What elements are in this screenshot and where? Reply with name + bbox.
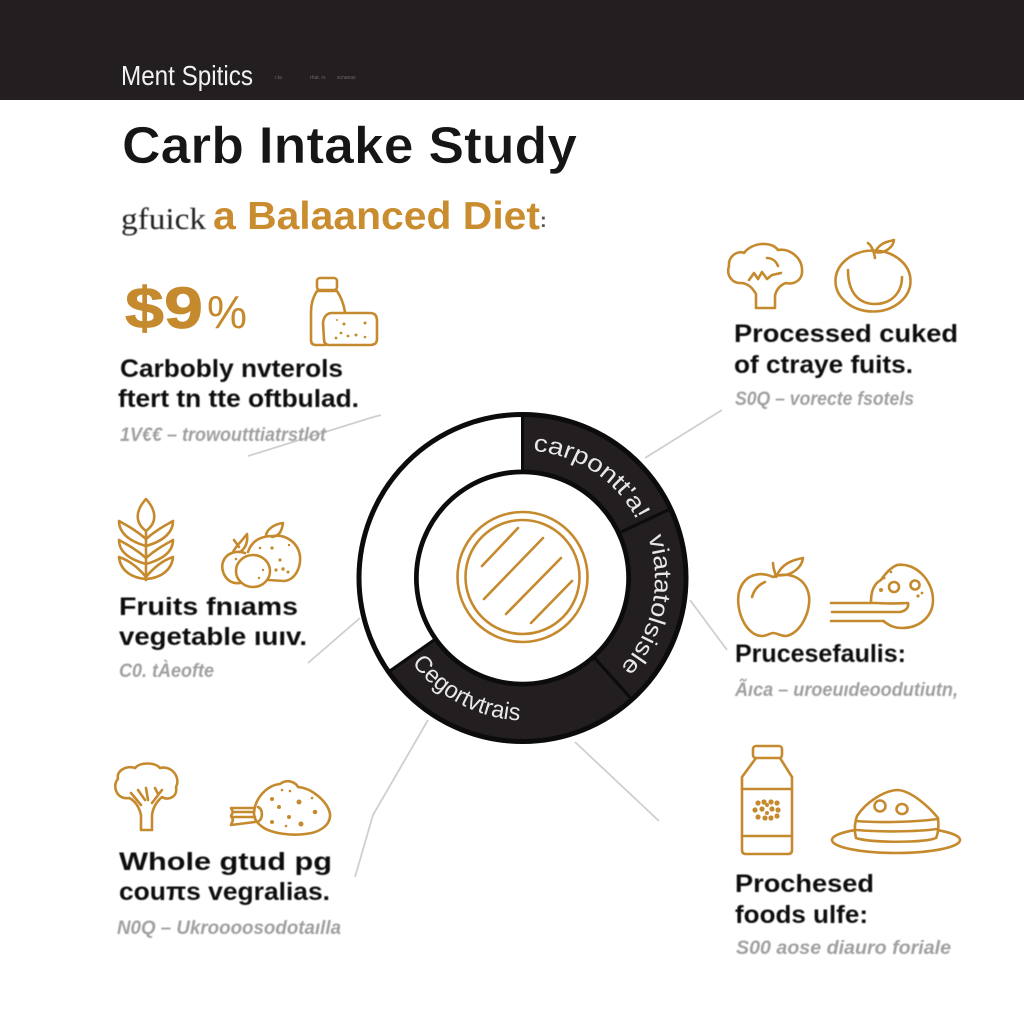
heading: Fruits fnıams <box>119 593 298 621</box>
heading: ftert tn tte oftbulad. <box>118 385 359 413</box>
caption: 1V€€ – trowoutttiatrstlot <box>120 425 327 446</box>
icon: wheat <box>119 499 173 580</box>
header label: Ment Spitics <box>121 60 253 91</box>
caption: Ãıca – uroeuıdeoodutiutn, <box>734 679 958 701</box>
icon: apple <box>738 558 809 636</box>
header faint navigation <box>275 75 356 81</box>
header bar <box>0 0 1024 100</box>
icon: central plate <box>458 512 588 642</box>
donut chart <box>356 412 688 744</box>
panel: middle right <box>734 558 958 701</box>
heading <box>119 848 332 906</box>
heading: Prucesefaulis: <box>735 640 906 668</box>
caption: S00 aose diauro foriale <box>736 938 951 959</box>
heading <box>118 355 359 413</box>
segment: blank <box>359 414 522 672</box>
panel: middle left <box>119 499 307 682</box>
icon: bottle and cheese <box>311 278 377 345</box>
outer ring <box>359 414 686 742</box>
stat value: % <box>207 286 247 338</box>
heading <box>734 320 958 379</box>
segment label 3: Cegortvtrais <box>415 656 520 720</box>
heading: foods ulfe: <box>735 901 868 929</box>
stat value <box>125 276 247 341</box>
icon: cake on plate <box>832 790 960 853</box>
heading: Prochesed <box>735 870 874 898</box>
caption: N0Q – Ukroooosodotaılla <box>117 918 341 939</box>
heading <box>735 870 874 929</box>
title: Carb Intake Study <box>122 117 577 175</box>
header faint navigation: r.ta <box>275 75 282 81</box>
icon: bottle <box>742 746 792 854</box>
icon: broccoli <box>115 764 177 830</box>
icon: broccoli <box>728 244 802 308</box>
subtitle: a Balaanced Diet <box>213 195 540 238</box>
inner ring <box>416 472 628 684</box>
icon: cookie on spoon <box>831 565 933 628</box>
segment label 1: carpontt'a! <box>534 438 650 518</box>
heading: of ctraye fuits. <box>734 351 913 379</box>
segment: carpontt <box>522 414 671 533</box>
heading: couπs vegralias. <box>119 878 330 906</box>
segment label 2: viatatolsisle <box>623 534 670 673</box>
icon: fruit group <box>222 523 300 587</box>
heading: Processed cuked <box>734 320 958 348</box>
panel: bottom left <box>115 764 341 939</box>
heading: Whole gtud pg <box>119 848 332 876</box>
heading: vegetable ıuıv. <box>119 623 307 651</box>
icon: potato with sticks <box>231 781 330 835</box>
heading: Carbobly nvterols <box>120 355 343 383</box>
heading <box>119 593 307 651</box>
subtitle: gfuick <box>121 201 207 236</box>
segment: viatatolsisle <box>594 509 686 700</box>
header faint navigation: rhat. rs <box>310 75 326 81</box>
stat value: $9 <box>125 276 203 341</box>
icon: apple <box>836 240 910 312</box>
subtitle: : <box>540 210 547 232</box>
panel: bottom right <box>735 746 960 959</box>
caption: S0Q – vorecte fsotels <box>735 389 914 410</box>
caption: C0. tÀeofte <box>119 660 214 682</box>
panel: top left stat <box>118 276 377 446</box>
header faint navigation: scnanas <box>337 75 356 81</box>
connector lines <box>248 410 727 877</box>
panel: top right <box>728 240 958 410</box>
segment: cegortvtrais <box>388 639 632 742</box>
